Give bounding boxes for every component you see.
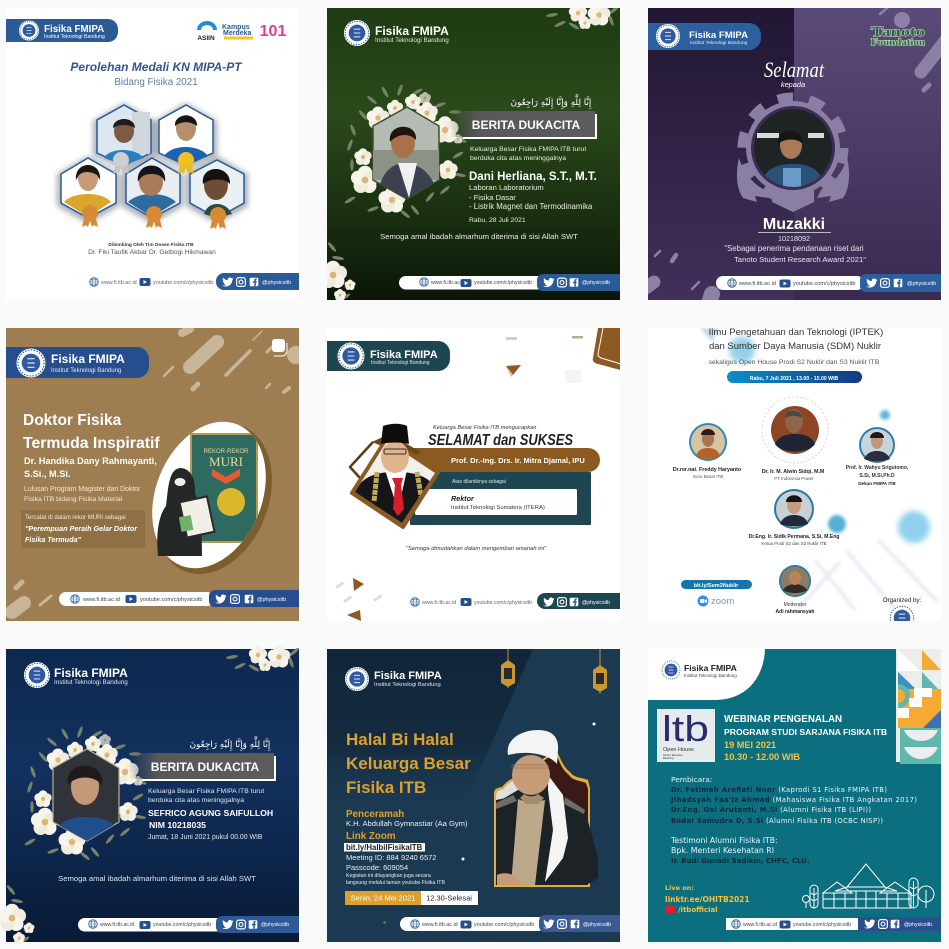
oval with book and person: MURI [209,454,243,469]
event details: bit.ly/HalbilFisikaITB [346,843,423,852]
date box [345,891,478,905]
obituary text: Dani Herliana, S.T., M.T. [469,171,597,183]
award text [724,234,866,264]
header bar: Institut Teknologi Bandung [371,360,430,366]
banner: BERITA DUKACITA [472,118,581,132]
webinar title: WEBINAR PENGENALAN [724,714,842,725]
date pill [727,371,862,383]
logo header: Fisika FMIPA [375,24,449,38]
footer [59,590,299,607]
headline: Doktor Fisika [23,412,122,429]
script heading: Selamat [764,57,825,82]
footer: @physicsitb [261,922,289,928]
description: Lulusan Program Magister dan Doktor [24,486,141,493]
live info: Live on: [665,884,694,892]
star dots: * [383,920,386,929]
hexagon portraits [57,103,248,224]
speakers list: Badai Samudra D, S.Si (Alumni Fisika ITB (OCBC NISP)) [671,817,883,825]
event details: Penceramah [346,809,404,820]
award text: "Sebagai penerima pendanaan riset dari [724,244,864,253]
header bar [648,23,761,50]
date pill: Rabu, 7 Juli 2021 , 13.00 - 15.00 WIB [750,376,839,382]
script heading [764,57,825,89]
panel: Halal Bi Halal [327,649,620,942]
decorative pills [12,329,305,612]
header corner: Fisika FMIPA [684,663,737,673]
speaker: Alwin Sidqi: Dr. Ir. M. Alwin Sidqi, M.M [762,469,824,475]
organizer: Organized by: [883,597,922,604]
heading: SELAMAT dan SUKSES [428,432,573,449]
speaker: Wahyu Srigutomo: S.Si, M.Si,Ph.D [859,473,895,479]
testimonial: Ir. Budi Gunadi Sadikin, CHFC, CLU. [671,857,810,865]
flowers: bottom left [327,242,356,300]
script heading: kepada [781,80,805,89]
arabic text: إِنَّا لِلَّٰهِ وَإِنَّا إِلَيْهِ رَاجِعُونَ [190,736,271,751]
footer: @physicsitb [907,281,936,287]
footer: @physicsitb [582,600,610,606]
obituary text: Keluarga Besar Fisika FMIPA ITB turut [148,788,264,795]
speakers list: Pembicara: [671,775,712,784]
panel: obituary Sefrico [0,645,300,944]
headline: Keluarga Besar [346,754,471,773]
obituary text: berduka cita atas meninggalnya [148,797,244,804]
speaker: Sidik Permana: Dr.Eng. Ir. Sidik Permana, S.Si, M.Eng [749,534,839,540]
logo header: Institut Teknologi Bandung [54,679,128,686]
header bar: Fisika FMIPA [689,30,748,41]
speakers list: Dr. Fatimah Arofiati Noor (Kaprodi S1 Fisika FMIPA ITB) [671,786,887,794]
partner logos [197,21,286,42]
name and position card: Institut Teknologi Sumatera (ITERA) [451,505,545,511]
logo header [344,20,449,46]
footer: @physicsitb [904,922,932,928]
organizer [883,598,921,621]
webinar title: 10.30 - 12.00 WIB [724,751,800,762]
obituary text: Laboran Laboratorium [469,183,544,192]
name and position card: Rektor [451,494,475,503]
arabic text: إِنَّا لِلَّٰهِ وَإِنَّا إِلَيْهِ رَاجِعُونَ [511,94,592,109]
speaker: Freddy Haryanto: Guru Besar ITB [693,474,723,479]
logo header [24,662,128,688]
headline [23,412,160,452]
footer: youtube.com/c/physicsitb [474,280,532,286]
event details: K.H. Abdullah Gymnastiar (Aa Gym) [346,819,468,828]
footer [78,916,299,933]
footer: youtube.com/c/physicsitb [474,922,534,928]
wish: "Semoga dimudahkan dalam mengemban amanah ini" [406,546,547,552]
live info [665,884,750,914]
speaker: Freddy Haryanto: Dr.rer.nat. Freddy Haryanto [673,467,742,473]
header bar [6,347,149,378]
footer: @physicsitb [583,922,611,928]
partner logos: ASIIN [197,35,215,42]
obituary text: Rabu, 28 Juli 2021 [469,217,526,224]
intro line: Keluarga Besar Fisika ITB mengucapkan [433,425,536,431]
flowers: top right [546,8,618,30]
footer: youtube.com/c/physicsitb [153,280,213,286]
headline [346,730,471,797]
obituary text: SEFRICO AGUNG SAIFULLOH [148,808,273,818]
obituary text: Semoga amal ibadah almarhum diterima di sisi Allah SWT [380,232,578,241]
banner: BERITA DUKACITA [151,760,260,774]
event details: Link Zoom [346,831,396,842]
oval with book and person [152,422,272,574]
panel: nuclear webinar [673,328,938,621]
title: Perolehan Medali KN MIPA-PT [70,60,243,74]
name: Dr. Handika Dany Rahmayanti, [24,456,157,466]
floral wreath [24,726,147,861]
speaker: Sidik Permana: Ketua Prodi S2 dan S3 Nuklir ITB [761,541,827,546]
registration link [681,580,752,589]
partner logos: 101 [260,23,286,40]
floral wreath [344,84,467,219]
footer: @physicsitb [262,280,291,286]
headline: Halal Bi Halal [346,730,454,749]
speaker: Alwin Sidqi: PT Indonesia Power [774,476,814,481]
testimonial: Bpk. Menteri Kesehatan RI [671,846,774,855]
logo header: Institut Teknologi Bandung [374,682,441,688]
webinar title [724,714,887,762]
panel: medal results [6,8,299,300]
quote box: Fisika Termuda" [25,535,81,544]
testimonial [670,836,810,865]
obituary text: Jumat, 18 Juni 2021 pukul 00.00 WIB [148,834,263,841]
building line art [802,864,934,908]
panel: Tanoto award Muzakki [646,8,946,300]
speaker: Wahyu Srigutomo: Dekan FMIPA ITB [858,481,896,486]
ITB open house logo: Bandung [663,756,674,760]
diamond portrait [350,424,442,538]
speakers list: Jihadsyah Faa'iz Ahmad (Mahasiswa Fisika ITB Angkatan 2017) [670,796,917,804]
supervisors: Dr. Fiki Taufik Akbar Dr. Getbogi Hikmawan [88,249,216,256]
description [24,486,141,503]
subtitle: Bidang Fisika 2021 [114,77,198,88]
obituary text [380,146,597,241]
footer: youtube.com/c/physicsitb [140,597,202,603]
banner [450,111,597,139]
decorative shapes [335,328,628,621]
decorative pills [646,8,946,300]
medals [82,152,226,229]
quote box: "Perempuan Peraih Gelar Doktor [25,524,138,533]
testimonial: Testimoni Alumni Fisika ITB: [670,836,778,845]
headline: Fisika ITB [346,778,426,797]
obituary text: - Listrik Magnet dan Termodinamika [469,202,593,211]
footer: www.fi.itb.ac.id [431,280,465,286]
footer: @physicsitb [582,280,610,286]
headline: Termuda Inspiratif [23,435,160,452]
footer: www.fi.itb.ac.id [82,597,120,603]
footer [399,274,620,291]
logo header: Fisika FMIPA [374,670,442,682]
multi-post icon [272,339,287,356]
header bar: Fisika FMIPA [44,24,104,35]
event details: Passcode: 609054 [346,863,408,872]
footer [411,593,620,609]
header corner: Institut Teknologi Bandung [684,673,737,678]
footer [400,915,620,932]
live info: /itbofficial [678,906,718,914]
header bar [327,341,450,371]
obituary text: Semoga amal ibadah almarhum diterima di sisi Allah SWT [58,874,256,883]
ITB open house logo [657,708,715,762]
date box: Senin, 24 Mei 2021 [351,894,415,902]
award text: 10218092 [778,234,810,243]
obituary text: - Fisika Dasar [469,193,516,202]
live info: linktr.ee/OHITB2021 [665,895,750,904]
footer: @physicsitb [257,597,286,603]
gear emblem [737,99,849,212]
obituary text: berduka cita atas meninggalnya [470,155,566,162]
partner logos: Kampus [222,24,250,31]
panel: congratulations rector [327,328,628,621]
supervisors [88,242,216,256]
event details: langsung melalui laman youtube Fisika ITB [346,880,445,886]
footer: www.fi.itb.ac.id [738,281,776,287]
footer: youtube.com/c/physicsitb [793,922,851,928]
hexagon portrait [53,749,120,841]
banner [129,753,276,781]
title clipped at top: sekaligus Open House Prodi S2 Nuklir dan S3 Nuklir ITB [709,359,880,366]
name: Muzakki [763,216,825,233]
footer: www.fi.itb.ac.id [422,600,456,606]
event details: Meeting ID: 884 9240 6572 [346,853,436,862]
moderator: Adi rahmansyah [776,609,814,615]
header corner [648,649,765,700]
header bar [6,19,118,42]
panel: ITB open house webinar [648,649,941,942]
award text: Tanoto Student Research Award 2021" [734,255,866,264]
ITB open house logo: Institut Teknologi [663,753,683,757]
registration link: bit.ly/Sem3Nuklir [694,583,739,589]
speaker: Freddy Haryanto [673,423,742,479]
name: S.Si., M.Si. [24,469,70,479]
footer: youtube.com/c/physicsitb [474,600,532,606]
header bar: Institut Teknologi Bandung [690,40,748,46]
title clipped at top [709,327,883,366]
logo header: Fisika FMIPA [54,666,128,680]
obituary text [58,788,273,883]
header bar: Fisika FMIPA [370,349,438,361]
webinar title: PROGRAM STUDI SARJANA FISIKA ITB [724,727,887,737]
moderator: Moderator [784,602,807,608]
star dots [383,722,596,929]
quote box: Tercatat di dalam rekor MURI sebagai [25,515,126,521]
circular portrait [754,109,832,190]
name and position card: Prof. Dr.-Ing. Drs. Ir. Mitra Djamal, IPU [451,456,585,465]
oval with book and person: REKOR-REKOR [204,449,249,455]
speakers list: Dr.Eng. Osi Arutanti, M.Si (Alumni Fisika ITB (LIPI)) [671,806,871,814]
portrait in arch [494,730,598,887]
header bar: Institut Teknologi Bandung [44,34,105,40]
geometric pattern [896,649,941,764]
panel: youngest physics doctor [6,328,305,621]
speakers list [670,775,917,825]
speaker: Alwin Sidqi [762,397,828,481]
Tanoto Foundation logo [871,25,926,48]
panel: obituary Dani Herliana [319,3,620,301]
partner logos: Merdeka [223,30,252,37]
obituary text: NIM 10218035 [149,820,206,830]
footer: www.fi.itb.ac.id [421,922,458,928]
Tanoto Foundation logo: Tanoto [871,25,925,40]
header bar: Institut Teknologi Bandung [51,368,121,374]
zoom logo: zoom [711,596,734,607]
zoom logo [698,596,734,607]
description: Fisika ITB bidang Fisika Material [24,496,123,503]
footer: www.fi.itb.ac.id [100,280,137,286]
obituary text: Keluarga Besar Fisika FMIPA ITB turut [470,146,586,153]
footer [726,917,941,931]
event details [344,809,468,886]
name and position card [405,448,600,525]
speaker: Sidik Permana [749,489,839,546]
moderator [776,565,814,615]
blue blobs and diagonal rays [700,328,938,612]
footer: youtube.com/c/physicsitb [153,922,211,928]
logo header: Institut Teknologi Bandung [375,37,449,44]
event details: Kegiatan ini ditayangkan juga secara [346,873,431,879]
webinar title: 19 MEI 2021 [724,740,776,750]
logo header [345,667,442,691]
speaker: Wahyu Srigutomo [846,427,909,486]
footer: www.fi.itb.ac.id [100,922,134,928]
flowers: bottom left [0,884,35,944]
supervisors: Dibimbing Oleh Tim Dosen Fisika ITB [108,242,194,248]
footer: www.fi.itb.ac.id [743,922,777,928]
footer [90,273,299,290]
ITB open house logo: Open House [663,747,694,753]
name [24,456,157,479]
footer [716,274,941,292]
hexagon portrait [373,107,439,199]
date box: 12.30-Selesai [426,894,472,902]
footer: youtube.com/c/physicsitb [793,281,856,287]
title clipped at top: dan Sumber Daya Manusia (SDM) Nuklir [709,341,881,352]
name and position card: Atas dilantiknya sebagai [452,479,506,485]
header bar: Fisika FMIPA [51,352,125,366]
Tanoto Foundation logo: Foundation [871,38,926,48]
title clipped at top: Ilmu Pengetahuan dan Teknologi (IPTEK) [709,327,883,338]
lanterns [501,649,607,694]
speaker: Wahyu Srigutomo: Prof. Ir. Wahyu Srigutomo, [846,465,909,471]
ITB open house logo: ltb [662,708,709,749]
quote box [21,510,145,548]
flowers: top right [226,645,300,672]
